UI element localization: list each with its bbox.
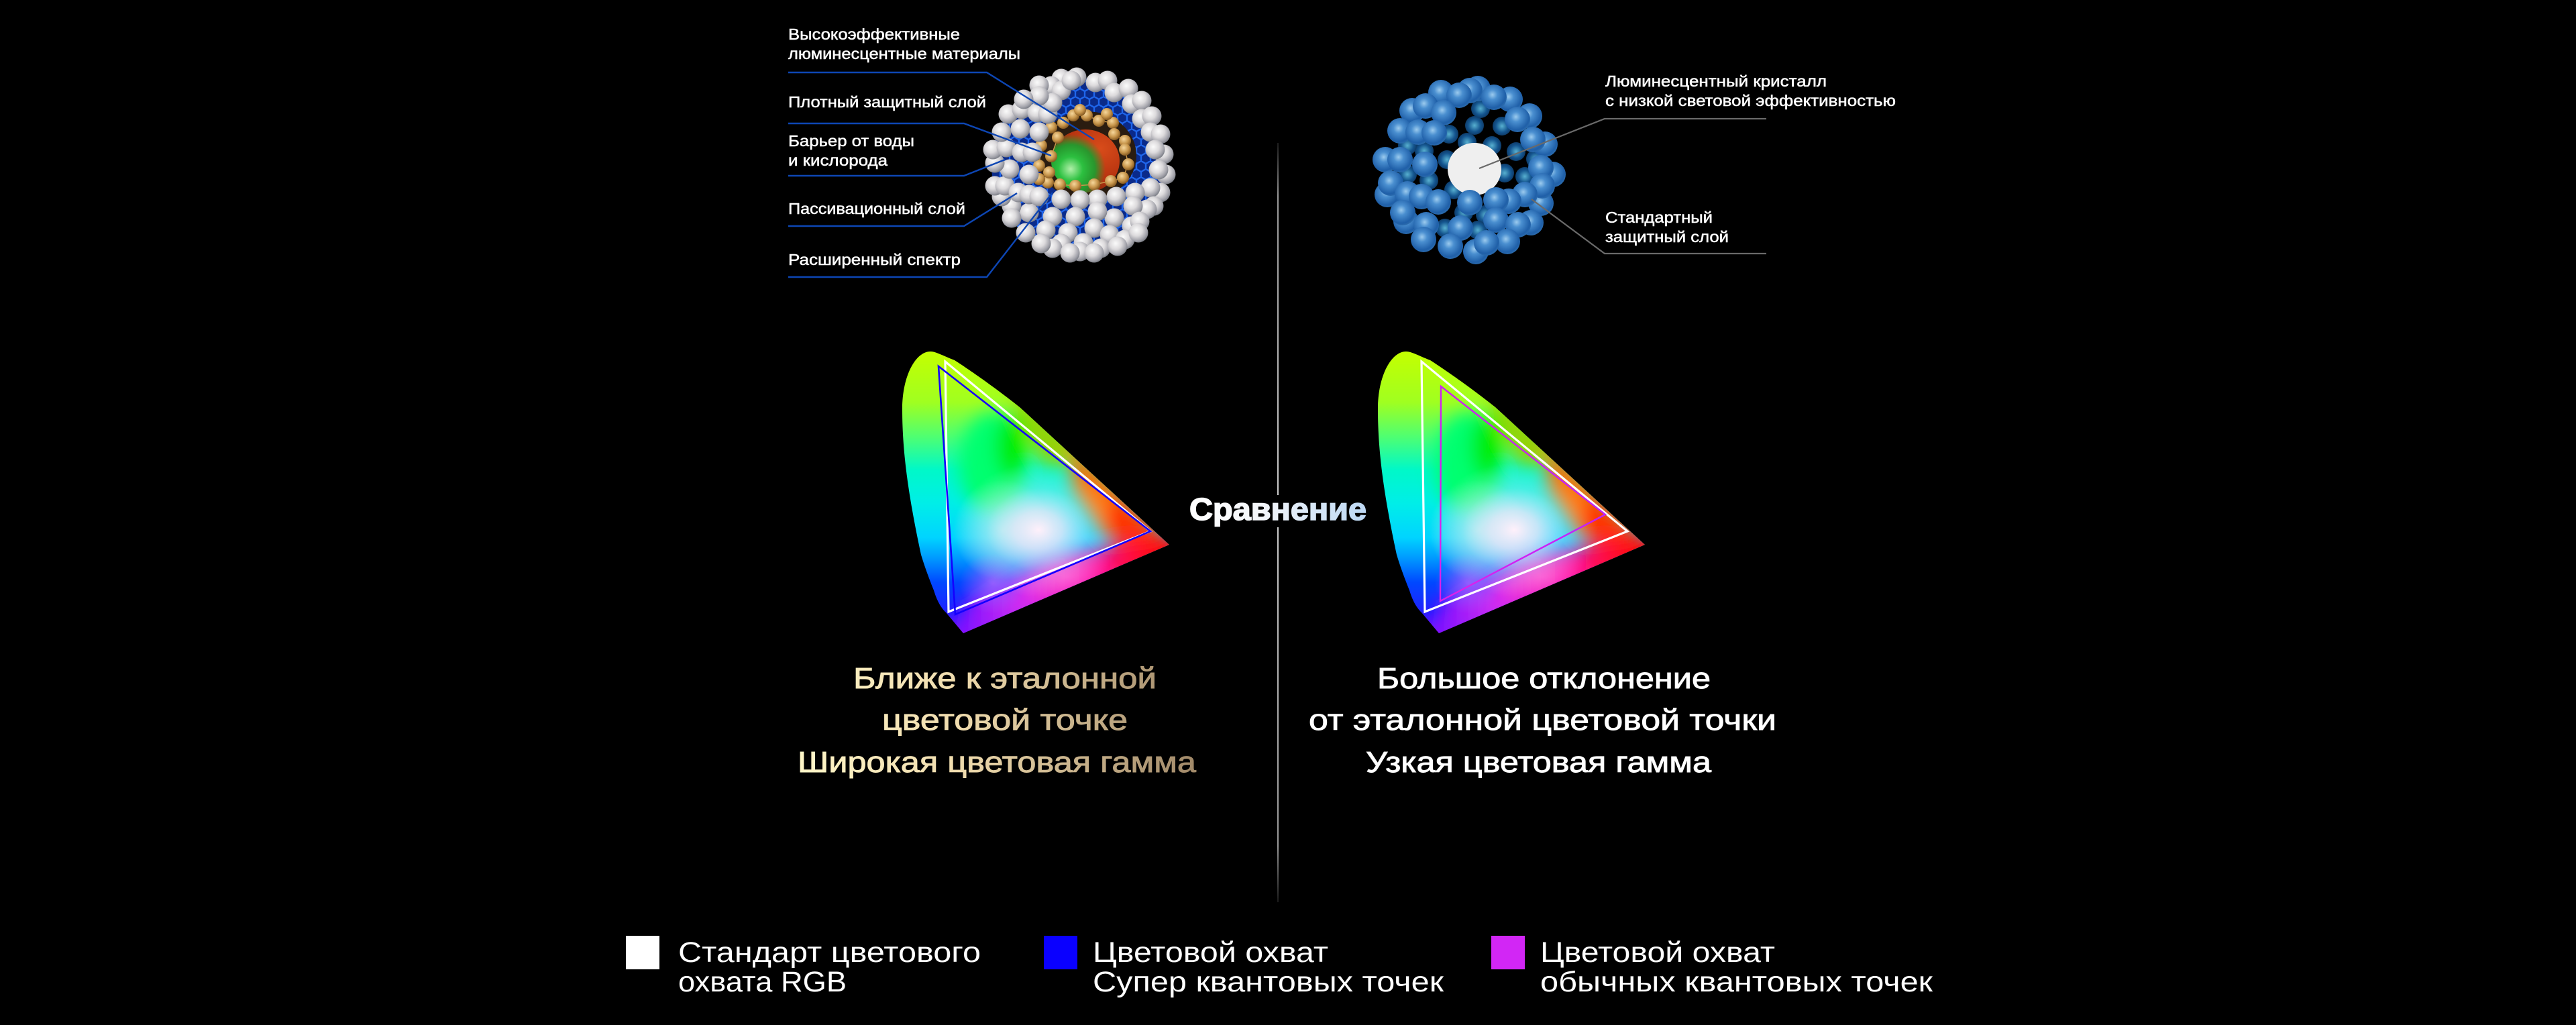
legend: ordinary quantum dots bbox=[1491, 936, 1933, 998]
text block: narrow gamut conclusion: Большое отклонение bbox=[1377, 662, 1711, 695]
legend: RGB standard: Стандарт цветового bbox=[678, 936, 981, 969]
callouts: ordinary quantum dot layers bbox=[1479, 72, 1896, 254]
callouts: super quantum dot layers: и кислорода bbox=[788, 152, 888, 169]
text block: wide gamut conclusion: цветовой точке bbox=[882, 704, 1128, 737]
chart: super quantum dot colour gamut bbox=[892, 342, 1194, 651]
chart: ordinary quantum dot colour gamut bbox=[1368, 342, 1670, 651]
legend: ordinary quantum dots: Цветовой охват bbox=[1540, 936, 1775, 969]
callouts: ordinary quantum dot layers: Люминесцентный кристалл bbox=[1605, 72, 1827, 90]
text block: narrow gamut conclusion: от эталонной цветовой точки bbox=[1309, 704, 1776, 737]
callouts: ordinary quantum dot layers: Стандартный bbox=[1605, 209, 1713, 226]
callouts: ordinary quantum dot layers: защитный слой bbox=[1605, 228, 1729, 246]
legend: super quantum dots bbox=[1044, 936, 1444, 998]
text block: narrow gamut conclusion bbox=[1309, 662, 1776, 779]
centre divider bbox=[1277, 143, 1279, 902]
text block: wide gamut conclusion: Ближе к эталонной bbox=[853, 662, 1157, 695]
text block: wide gamut conclusion: Широкая цветовая гамма bbox=[798, 746, 1197, 779]
callouts: super quantum dot layers: люминесцентные материалы bbox=[788, 45, 1020, 62]
heading: comparison: Сравнение bbox=[1189, 492, 1366, 527]
legend: super quantum dots: Супер квантовых точек bbox=[1093, 966, 1444, 998]
legend: ordinary quantum dots: обычных квантовых точек bbox=[1540, 966, 1933, 998]
legend: RGB standard bbox=[626, 936, 981, 998]
text block: wide gamut conclusion bbox=[798, 662, 1197, 779]
callouts: super quantum dot layers: Барьер от воды bbox=[788, 132, 914, 150]
callouts: ordinary quantum dot layers: с низкой световой эффективностью bbox=[1605, 92, 1896, 109]
illustration: ordinary quantum dot sphere bbox=[1373, 76, 1566, 264]
callouts: super quantum dot layers: Расширенный спектр bbox=[788, 251, 961, 268]
legend: super quantum dots: Цветовой охват bbox=[1093, 936, 1328, 969]
callouts: super quantum dot layers bbox=[788, 25, 1094, 277]
callouts: super quantum dot layers: Пассивационный слой bbox=[788, 200, 965, 217]
callouts: super quantum dot layers: Высокоэффективные bbox=[788, 25, 960, 43]
callouts: super quantum dot layers: Плотный защитный слой bbox=[788, 93, 986, 111]
illustration: super quantum dot sphere bbox=[983, 67, 1175, 263]
text block: narrow gamut conclusion: Узкая цветовая гамма bbox=[1366, 746, 1712, 779]
legend: RGB standard: охвата RGB bbox=[678, 966, 847, 998]
